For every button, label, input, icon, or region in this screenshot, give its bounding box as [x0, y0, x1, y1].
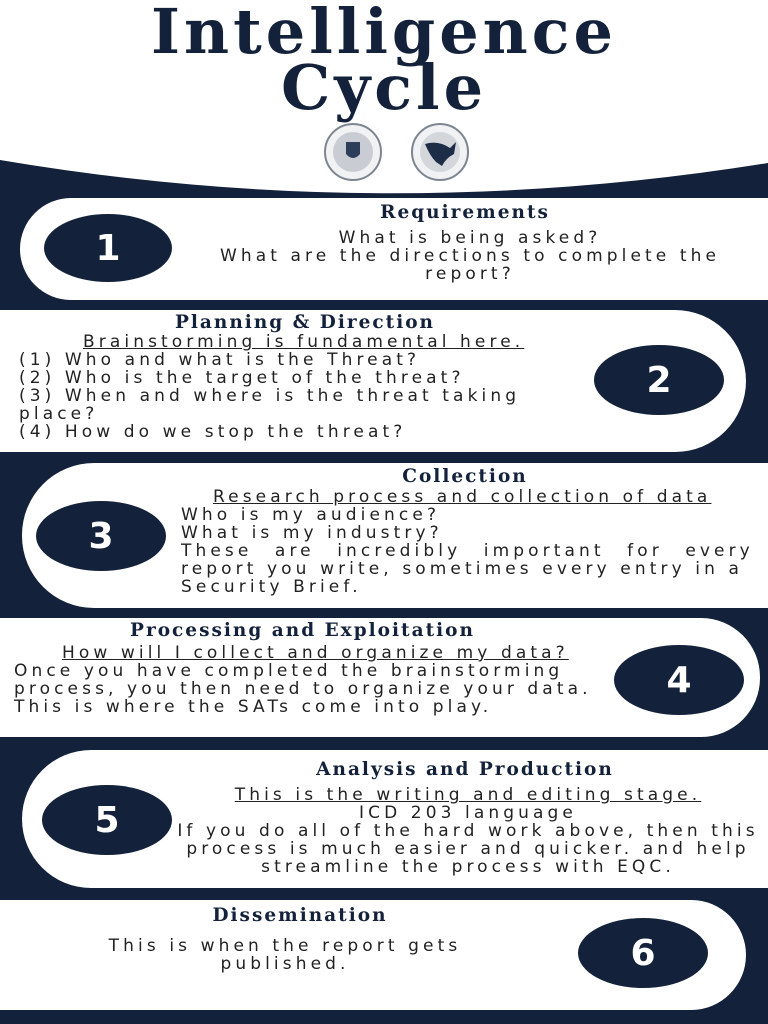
heading: collection: Collection	[402, 466, 528, 487]
text: collection: Research process and collection of data	[213, 487, 711, 507]
text: dissemination	[108, 936, 461, 974]
text: requirements: report?	[425, 264, 515, 284]
text: analysis: process is much easier and quicker. and help	[186, 839, 750, 859]
text: collection	[180, 487, 754, 597]
panel 1: requirements	[20, 198, 768, 300]
text: planning	[19, 332, 524, 442]
number 1: 1	[95, 228, 121, 268]
number 4	[614, 645, 744, 715]
text: processing: This is where the SATs come into play.	[14, 697, 492, 717]
text: requirements: What is being asked?	[339, 228, 601, 248]
text: processing	[14, 643, 592, 717]
number 5: 5	[94, 800, 120, 840]
title: Cycle	[281, 51, 487, 124]
heading: dissemination: Dissemination	[212, 905, 388, 926]
panel 5: analysis	[22, 750, 768, 888]
heading: processing: Processing and Exploitation	[130, 620, 475, 641]
text: processing: Once you have completed the brainstorming	[14, 661, 563, 681]
logo: counterterrorism group	[412, 124, 468, 180]
text: planning: (3) When and where is the threat taking	[19, 386, 520, 406]
text: collection: These are incredibly important for every	[181, 541, 754, 561]
text: planning: Brainstorming is fundamental here.	[83, 332, 524, 352]
text: processing: process, you then need to organize your data.	[14, 679, 592, 699]
heading: analysis: Analysis and Production	[316, 759, 614, 780]
number 4: 4	[666, 660, 692, 700]
heading: planning: Planning & Direction	[175, 312, 435, 333]
text: analysis: ICD 203 language	[359, 803, 577, 823]
number 1	[44, 214, 172, 282]
number 6: 6	[630, 932, 656, 974]
text: analysis: This is the writing and editing stage.	[235, 785, 701, 805]
number 5	[42, 785, 172, 855]
panel 2: planning	[0, 310, 746, 452]
text: collection: report you write, sometimes every entry in a	[181, 559, 743, 579]
text: planning: place?	[19, 404, 98, 424]
number 3	[36, 501, 166, 571]
text: dissemination: This is when the report gets	[109, 936, 461, 956]
number 2: 2	[646, 360, 672, 400]
text: collection: Who is my audience?	[181, 505, 440, 525]
text: dissemination: published.	[220, 954, 350, 974]
text: analysis: streamline the process with EQC.	[261, 857, 675, 877]
heading: requirements: Requirements	[380, 202, 550, 223]
text: requirements: What are the directions to complete the	[220, 246, 720, 266]
text: requirements	[220, 228, 720, 284]
logo: Paladin 7	[325, 124, 381, 180]
text: analysis: If you do all of the hard work above, then this	[177, 821, 759, 841]
text: processing: How will I collect and organize my data?	[62, 643, 569, 663]
text: planning: (4) How do we stop the threat?	[19, 422, 406, 442]
text: collection: Security Brief.	[181, 577, 362, 597]
text: collection: What is my industry?	[181, 523, 443, 543]
number 6	[578, 918, 708, 988]
panel 3: collection	[22, 463, 768, 608]
title	[151, 0, 617, 124]
number 3: 3	[88, 516, 114, 556]
text: analysis	[177, 785, 759, 877]
logos	[324, 123, 469, 181]
number 2	[594, 345, 724, 415]
text: planning: (2) Who is the target of the threat?	[19, 368, 465, 388]
text: planning: (1) Who and what is the Threat?	[19, 350, 420, 370]
panel 6: dissemination	[0, 900, 746, 1010]
panel 4: processing	[0, 618, 760, 737]
